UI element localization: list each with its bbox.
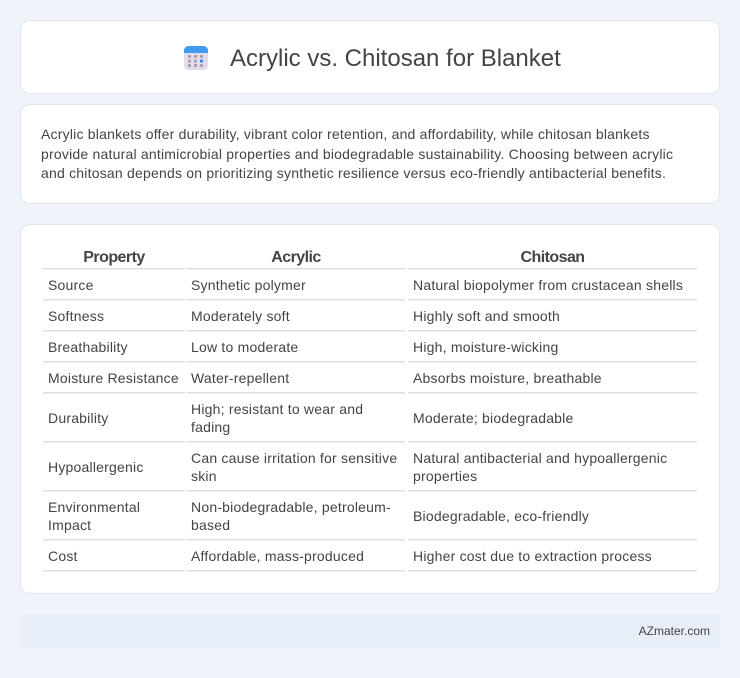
footer credit: AZmater.com bbox=[639, 624, 710, 638]
intro text: provide natural antimicrobial properties and biodegradable sustainability. Choosing between acrylic bbox=[41, 146, 673, 162]
row: Durability: High; resistant to wear and bbox=[191, 401, 363, 417]
title card bbox=[20, 20, 720, 94]
row: Durability: Durability bbox=[48, 410, 108, 426]
row: Moisture Resistance bbox=[48, 370, 602, 386]
row: Hypoallergenic: skin bbox=[191, 468, 217, 484]
row: Breathability: Low to moderate bbox=[191, 339, 298, 355]
row: Environmental Impact bbox=[48, 499, 589, 533]
row: Source: Source bbox=[48, 277, 94, 293]
table header: Acrylic bbox=[271, 249, 321, 266]
row: Softness: Moderately soft bbox=[191, 308, 290, 324]
row: Breathability: Breathability bbox=[48, 339, 128, 355]
footer bar bbox=[20, 614, 720, 648]
row: Breathability: High, moisture-wicking bbox=[413, 339, 558, 355]
title: Acrylic vs. Chitosan for Blanket bbox=[230, 45, 561, 72]
row: Environmental Impact: Impact bbox=[48, 517, 91, 533]
row: Hypoallergenic: Hypoallergenic bbox=[48, 459, 144, 475]
row: Source: Synthetic polymer bbox=[191, 277, 306, 293]
row: Hypoallergenic: Natural antibacterial and hypoallergenic bbox=[413, 450, 667, 466]
table header bbox=[83, 249, 585, 266]
intro card bbox=[20, 104, 720, 204]
row: Environmental Impact: Non-biodegradable, petroleum- bbox=[191, 499, 391, 515]
row: Source: Natural biopolymer from crustacean shells bbox=[413, 277, 683, 293]
icon: calendar bbox=[184, 46, 208, 70]
row: Hypoallergenic: Can cause irritation for sensitive bbox=[191, 450, 397, 466]
row: Moisture Resistance: Absorbs moisture, breathable bbox=[413, 370, 602, 386]
row: Durability: fading bbox=[191, 419, 230, 435]
row: Softness: Softness bbox=[48, 308, 104, 324]
row: Cost bbox=[48, 548, 652, 564]
table header: Chitosan bbox=[520, 249, 585, 266]
row: Durability bbox=[48, 401, 574, 435]
row: Breathability bbox=[48, 339, 558, 355]
row: Softness bbox=[48, 308, 560, 324]
row: Softness: Highly soft and smooth bbox=[413, 308, 560, 324]
row: Cost: Cost bbox=[48, 548, 78, 564]
row: Cost: Affordable, mass-produced bbox=[191, 548, 364, 564]
table card bbox=[20, 224, 720, 594]
row: Cost: Higher cost due to extraction process bbox=[413, 548, 652, 564]
row: Moisture Resistance: Moisture Resistance bbox=[48, 370, 179, 386]
row: Environmental Impact: based bbox=[191, 517, 230, 533]
row: Durability: Moderate; biodegradable bbox=[413, 410, 574, 426]
intro text: and chitosan depends on prioritizing synthetic resilience versus eco-friendly antibacterial benefits. bbox=[41, 165, 666, 181]
intro text bbox=[41, 126, 673, 181]
row: Environmental Impact: Environmental bbox=[48, 499, 140, 515]
row: Hypoallergenic bbox=[48, 450, 667, 484]
row: Hypoallergenic: properties bbox=[413, 468, 477, 484]
row: Moisture Resistance: Water-repellent bbox=[191, 370, 289, 386]
intro text: Acrylic blankets offer durability, vibrant color retention, and affordability, while chitosan blankets bbox=[41, 126, 650, 142]
row: Source bbox=[48, 277, 683, 293]
row: Environmental Impact: Biodegradable, eco-friendly bbox=[413, 508, 589, 524]
table header: Property bbox=[83, 249, 145, 266]
